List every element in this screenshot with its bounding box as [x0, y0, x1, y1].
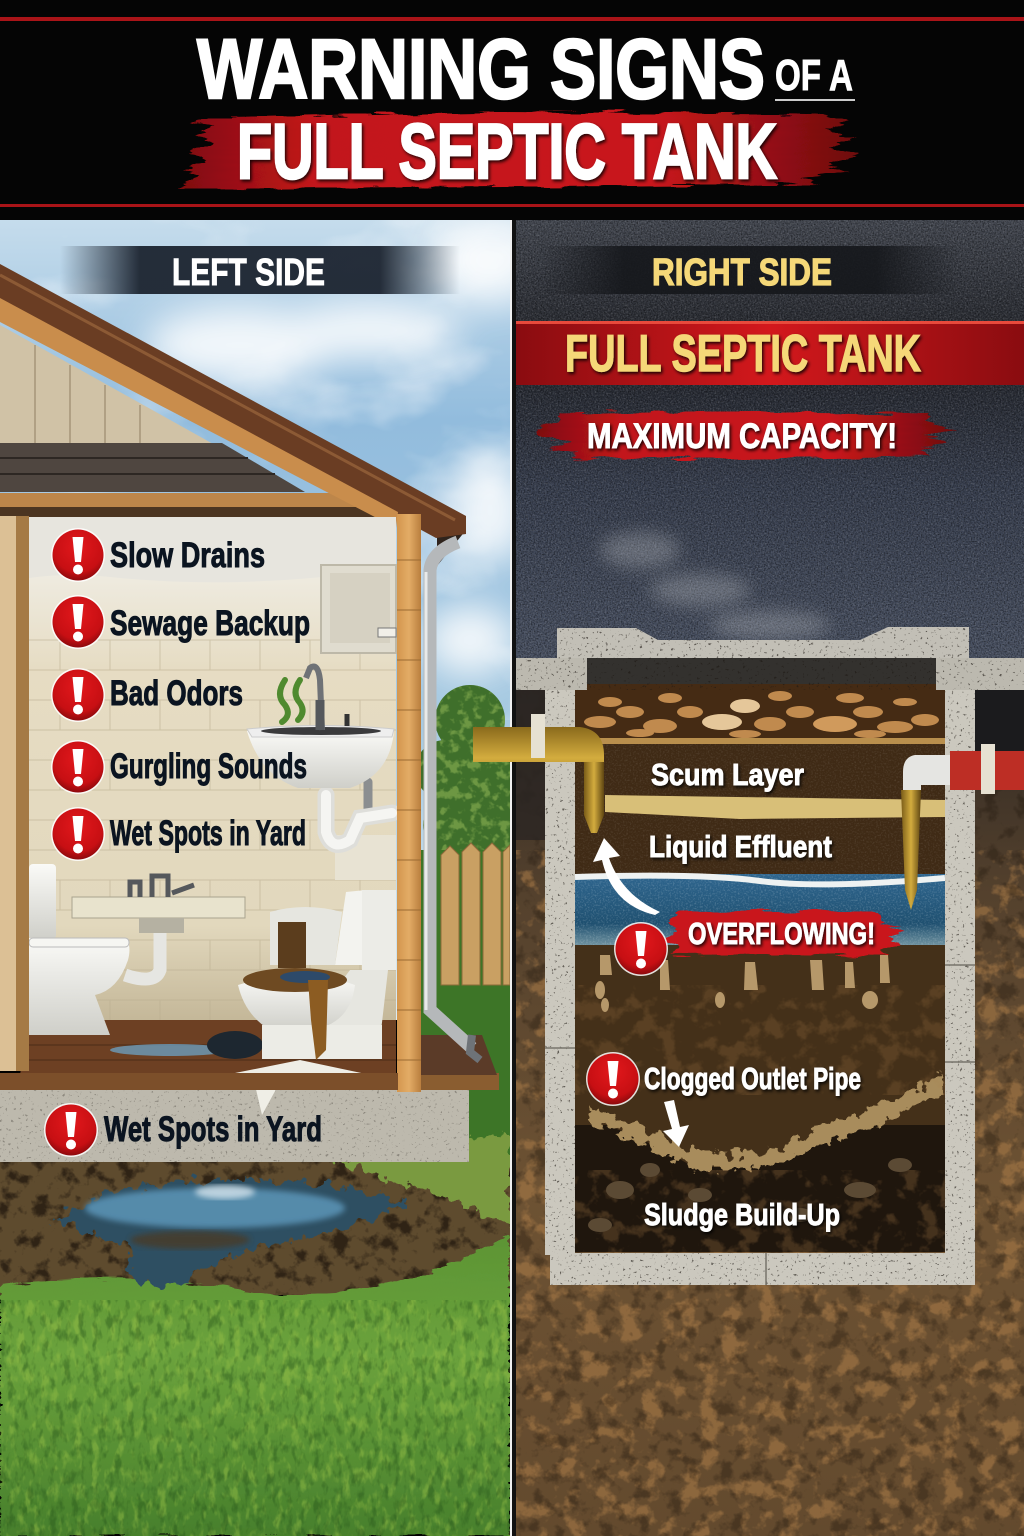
left toilet	[29, 864, 129, 1035]
warning: wet spots in yard	[51, 807, 306, 861]
concrete tank walls	[516, 627, 1024, 1288]
warning: sewage backup: Sewage Backup	[110, 604, 310, 643]
downspout	[426, 542, 480, 1060]
overflowing callout: OVERFLOWING!	[688, 916, 875, 951]
eave underside	[437, 534, 462, 565]
scum rocks	[584, 691, 939, 738]
wall cabinet	[321, 565, 396, 653]
picket fence	[441, 843, 510, 985]
counter sink	[72, 876, 245, 979]
left side label	[60, 246, 460, 294]
floor sill	[0, 1073, 499, 1090]
label: liquid effluent: Liquid Effluent	[649, 829, 832, 864]
warning: gurgling sounds: Gurgling Sounds	[110, 747, 307, 786]
overflowing callout	[614, 911, 905, 976]
label: scum layer: Scum Layer	[651, 757, 804, 792]
arrow: overflow up	[593, 838, 660, 915]
header	[0, 0, 1024, 220]
red brush stroke title: FULL SEPTIC TANK	[237, 107, 777, 195]
steam	[600, 532, 830, 639]
surrounding soil	[516, 680, 1024, 1536]
title line one: WARNING SIGNS	[197, 22, 765, 116]
bathroom interior	[20, 517, 396, 1115]
wall patch under sink	[335, 835, 396, 880]
grass behind fence	[421, 850, 510, 1170]
warning: bad odors: Bad Odors	[110, 674, 243, 713]
asphalt background	[516, 220, 1024, 665]
warning: wet spots in yard: Wet Spots in Yard	[110, 814, 306, 853]
warning: wet spots on foundation: Wet Spots in Yard	[104, 1110, 322, 1149]
tank interior layers	[575, 682, 945, 1255]
sink basin	[247, 666, 394, 788]
warning: slow drains: Slow Drains	[110, 536, 265, 575]
right side label: RIGHT SIDE	[652, 252, 832, 294]
yard puddle	[55, 1180, 405, 1286]
sky	[0, 215, 545, 1020]
clogged outlet callout	[586, 1052, 861, 1106]
banner: maximum capacity: MAXIMUM CAPACITY!	[587, 417, 897, 456]
warning: slow drains	[51, 528, 265, 582]
title line two small: OF A	[775, 51, 853, 100]
outlet pipe	[901, 744, 1024, 910]
right wood post	[397, 514, 421, 1092]
sink drain pipes	[326, 782, 392, 844]
roof	[0, 264, 466, 538]
overflowing toilet	[225, 890, 396, 1115]
clogged outlet callout: Clogged Outlet Pipe	[644, 1061, 861, 1096]
front yard soil	[0, 1135, 510, 1295]
wood floor	[20, 1020, 396, 1075]
warning: bad odors	[51, 668, 243, 722]
label: sludge build-up: Sludge Build-Up	[644, 1197, 840, 1232]
inlet brass pipe	[473, 714, 604, 833]
warning: sewage backup	[51, 595, 310, 649]
arrow: clog down	[663, 1100, 689, 1147]
gable wall	[0, 325, 215, 445]
left wood post	[0, 516, 29, 1071]
panel: left side house scene	[0, 215, 545, 1536]
right side label	[540, 246, 960, 294]
warning: gurgling sounds	[51, 740, 307, 794]
foundation	[0, 1090, 469, 1162]
lawn	[0, 1235, 510, 1536]
trees	[421, 685, 510, 850]
panel: right side septic tank	[516, 220, 1024, 1536]
back porch deck	[421, 1035, 497, 1075]
divider	[510, 220, 516, 1536]
warning: wet spots on foundation	[44, 1103, 322, 1157]
beam	[0, 493, 380, 507]
warning list	[51, 528, 310, 861]
icon: green odor waves	[280, 680, 303, 722]
left side label: LEFT SIDE	[172, 252, 325, 294]
roof shingles lower	[0, 443, 305, 492]
